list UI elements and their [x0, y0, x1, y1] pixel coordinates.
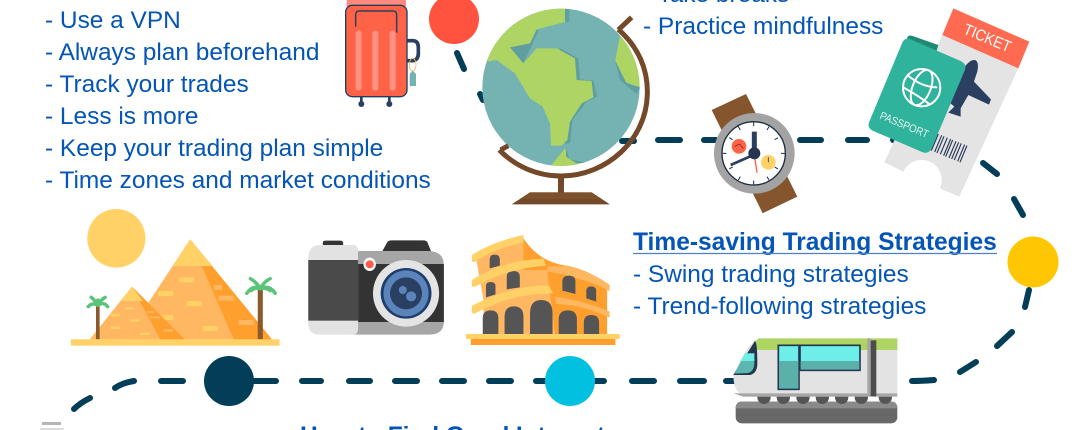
icon: suitcase: [346, 0, 418, 107]
text block: trading tips: - Time zones and market conditions: [45, 167, 431, 194]
text block: trading tips: - Less is more: [45, 103, 198, 130]
icon: colosseum: [466, 235, 620, 345]
heading: time-saving strategies: Time-saving Trading Strategies: [633, 229, 997, 256]
icon: ticket and passport: [869, 8, 1029, 197]
route stop: navy circle: [204, 356, 254, 406]
text block: time-saving trading strategies: - Swing trading strategies: [633, 261, 909, 288]
route stop: cyan circle: [545, 356, 595, 406]
text block: trading tips: - Always plan beforehand: [45, 39, 319, 66]
barcode: [931, 134, 967, 162]
train track: [736, 402, 897, 423]
text block: trading tips: - Track your trades: [45, 71, 249, 98]
globe stand: [499, 29, 647, 176]
globe sphere: [482, 9, 640, 166]
globe landmasses: [483, 5, 643, 170]
text block: time-saving trading strategies: - Trend-following strategies: [633, 293, 926, 320]
icon: wristwatch: [712, 94, 797, 213]
icon: globe: [482, 5, 647, 204]
icon: pyramids: [71, 209, 280, 346]
dashed travel route: [74, 53, 1029, 409]
text block: trading tips: - Keep your trading plan simple: [45, 135, 383, 162]
passport cover: [869, 39, 965, 153]
route stop: yellow circle: [1008, 236, 1058, 288]
train wheels: [757, 391, 892, 404]
text block: trading tips: - Use a VPN: [45, 7, 181, 34]
icon: train: [733, 338, 897, 423]
plane: [947, 60, 991, 117]
icon: cut-off grey device: [40, 422, 64, 430]
ticket header: [942, 8, 1029, 68]
ground: [71, 339, 280, 346]
passport globe: [903, 67, 940, 108]
passport label: PASSPORT: [878, 110, 930, 141]
sun: [87, 209, 145, 268]
ticket label: TICKET: [961, 21, 1014, 56]
route stop: red circle: [429, 0, 479, 44]
text block: breaks and mindfulness: [643, 0, 883, 40]
text block: breaks and mindfulness: - Practice mindfulness: [643, 13, 883, 40]
big pyramid: [124, 239, 272, 339]
passport back: [907, 36, 938, 51]
text block: time-saving trading strategies: [633, 229, 997, 320]
ticket body: [884, 35, 1018, 197]
palm trees: [88, 279, 275, 339]
icon: camera: [308, 240, 444, 335]
small pyramid: [90, 287, 185, 339]
text block: trading tips: [45, 7, 431, 194]
